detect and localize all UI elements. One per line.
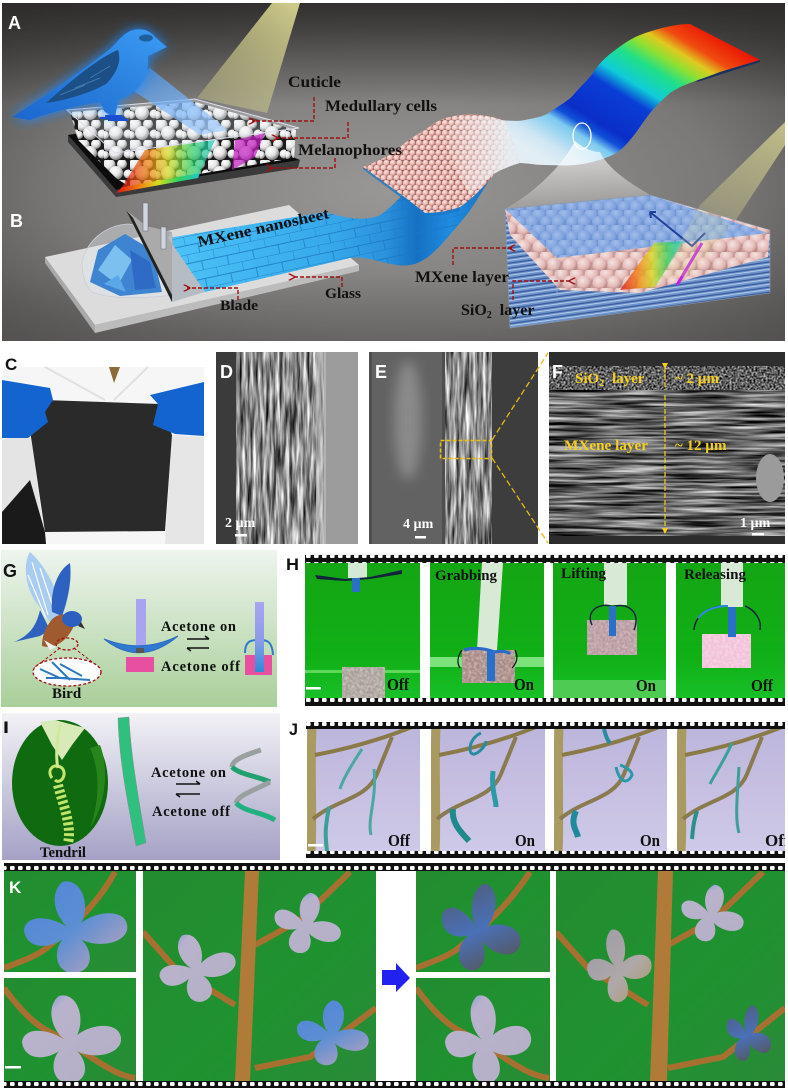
ribbon: rainbow structural-color film xyxy=(495,24,760,173)
panel D: SEM cross-section xyxy=(216,352,358,544)
label: SiO2 layer: 2 xyxy=(599,379,604,389)
gripper open xyxy=(104,599,178,672)
frame: lifting: On xyxy=(636,676,656,695)
connector: cuticle xyxy=(252,97,314,121)
label: SiO2 layer: SiO xyxy=(461,302,487,319)
label: melanophores: Melanophores xyxy=(298,142,402,159)
film strip top xyxy=(305,555,785,563)
cross-section block xyxy=(505,195,770,328)
film strip bottom xyxy=(305,698,785,706)
scale: 1 um: 1 µm xyxy=(740,516,771,531)
panel G: bird gripper schematic xyxy=(1,550,277,707)
doctor blade and dome xyxy=(82,203,205,302)
panel K: butterfly film strip xyxy=(4,863,785,1088)
frame: releasing: Releasing xyxy=(684,567,747,583)
scale bar xyxy=(235,534,247,536)
beam overlay on block xyxy=(660,205,732,280)
frame: on xyxy=(431,729,545,851)
panel C: photo of film xyxy=(2,355,204,544)
scale: 2 um: 2 µm xyxy=(225,516,256,531)
label I: I xyxy=(3,718,9,737)
flat ribbon xyxy=(118,717,146,846)
foot callout xyxy=(33,638,101,686)
icon: blue hologram bird xyxy=(12,29,167,120)
frame: off xyxy=(305,563,420,698)
frame: small top left: K xyxy=(9,878,22,897)
scale bar xyxy=(415,536,426,538)
ribbon: MXene sheet on glass xyxy=(45,173,495,333)
film strip top xyxy=(306,722,785,729)
frame: off: Off xyxy=(387,675,409,694)
beam: blue light from bird xyxy=(120,68,228,135)
label: SiO2 layer: 2 xyxy=(487,310,492,321)
label: Acetone on: Acetone on xyxy=(161,619,236,635)
gripper closed xyxy=(245,602,273,675)
connector: MXene layer xyxy=(453,248,512,265)
scale bar xyxy=(752,533,764,536)
connector: melanophores xyxy=(270,158,335,168)
film strip bottom xyxy=(306,851,785,858)
label: MXene layer: MXene layer xyxy=(415,269,509,286)
icon: flying bird xyxy=(14,552,85,650)
panel I: tendril schematic xyxy=(2,713,280,861)
frame: small bottom right xyxy=(416,978,550,1081)
frame: lifting: Lifting xyxy=(561,566,607,582)
label: ~12 um: ~ 12 µm xyxy=(675,438,727,454)
frame: small top left xyxy=(4,871,136,972)
label: SiO2 layer: layer xyxy=(500,302,534,319)
frame: off xyxy=(307,729,420,851)
panel H: gripper film strip xyxy=(286,555,785,706)
frame: large after xyxy=(556,871,785,1081)
icon: right arrow xyxy=(382,963,410,992)
frame: small top right xyxy=(416,871,550,972)
label: MXene layer: MXene layer xyxy=(564,438,648,454)
arrow: reflected light xyxy=(650,212,705,246)
label: ~2 um: ~ 2 µm xyxy=(675,371,719,387)
frame: lifting xyxy=(553,563,666,698)
arrows: thickness xyxy=(664,368,666,533)
frame: small bottom left xyxy=(4,978,136,1081)
tendril photo oval xyxy=(12,720,108,846)
arrows: reversible xyxy=(176,781,200,797)
label: SiO2 layer: layer xyxy=(612,371,645,387)
panel E: SEM cross-section xyxy=(369,352,538,544)
zoom lines from E to F xyxy=(492,353,548,543)
frame: grabbing xyxy=(430,563,544,698)
ribbon: pink SiO2 sphere section xyxy=(363,114,520,216)
connector: glass xyxy=(292,277,342,287)
label A: A xyxy=(8,13,21,33)
arrows: reversible xyxy=(187,636,209,651)
right glove xyxy=(150,382,204,436)
label: MXene nanosheet: MXene nanosheet xyxy=(196,205,332,251)
label C: C xyxy=(5,355,17,374)
beam: yellow light onto film xyxy=(700,122,785,226)
label: Bird: Bird xyxy=(52,686,82,702)
label F: F xyxy=(552,362,563,382)
frame: grabbing: On xyxy=(514,675,534,694)
frame: releasing xyxy=(676,563,785,698)
label: medullary cells: Medullary cells xyxy=(325,98,437,115)
black film xyxy=(30,400,172,532)
label: SiO2 layer: SiO xyxy=(575,371,599,387)
bird feather structure block xyxy=(67,99,300,197)
connector: SiO2 layer xyxy=(513,281,572,300)
frame: off xyxy=(677,729,788,851)
label J: J xyxy=(289,720,298,739)
label: Acetone off: Acetone off xyxy=(161,659,240,675)
panel J: tendril film strip xyxy=(289,720,788,858)
label H: H xyxy=(286,555,299,574)
callout: magnifier circle on film xyxy=(573,123,591,149)
label G: G xyxy=(3,561,17,581)
frame: on: On xyxy=(640,831,660,850)
connector: blade xyxy=(187,288,238,300)
film strip bottom xyxy=(4,1081,785,1088)
label: Acetone on: Acetone on xyxy=(151,765,226,781)
frame: on xyxy=(554,729,667,851)
label E: E xyxy=(375,362,387,382)
beam: yellow light onto feather xyxy=(197,3,300,113)
label: blade: Blade xyxy=(220,298,258,314)
scale: 4 um: 4 µm xyxy=(403,517,434,532)
connector: medullary cells xyxy=(275,122,348,138)
dashed zoom box xyxy=(440,440,492,458)
frame: large before xyxy=(143,871,376,1081)
glass plate xyxy=(45,205,359,333)
label B: B xyxy=(10,211,23,231)
frame: releasing: Off xyxy=(751,676,773,695)
label D: D xyxy=(220,362,233,382)
label: glass: Glass xyxy=(325,286,361,302)
panel: A and B schematic xyxy=(2,3,785,341)
label: Acetone off: Acetone off xyxy=(152,804,230,820)
frame: off: Off xyxy=(388,831,410,850)
helix ribbon xyxy=(232,750,275,820)
frame: on: On xyxy=(515,831,535,850)
label: Tendril: Tendril xyxy=(40,845,86,861)
callout: zoom cone xyxy=(505,141,650,209)
frame: grabbing: Grabbing xyxy=(435,568,498,584)
panel F: SEM zoom xyxy=(549,352,785,544)
left glove xyxy=(2,380,53,438)
film strip top xyxy=(4,863,785,871)
label: cuticle: Cuticle xyxy=(288,74,341,91)
